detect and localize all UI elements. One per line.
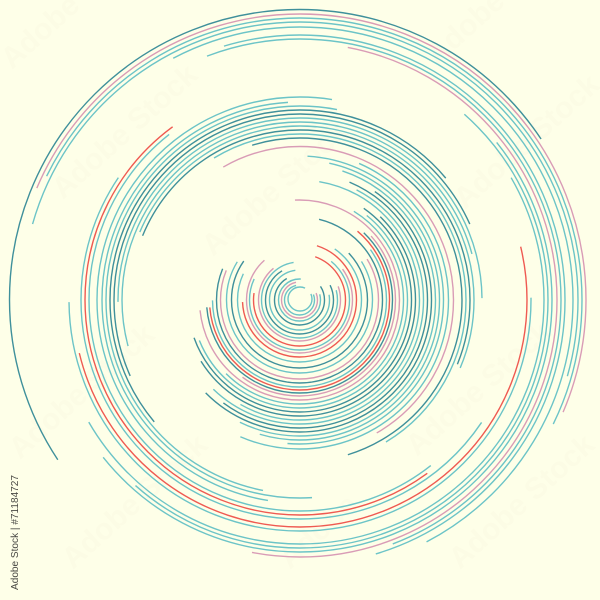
watermark pattern: Adobe Stock [443, 428, 600, 575]
watermark pattern: Adobe Stock [400, 315, 558, 462]
watermark pattern: Adobe [273, 488, 364, 575]
watermark pattern: Adobe Stock [56, 428, 214, 575]
watermark pattern: Adobe Stock [196, 115, 354, 262]
watermark pattern: Adobe Stock [3, 318, 161, 465]
watermark pattern: Adobe Stock [46, 58, 204, 205]
stock id caption: Adobe Stock | #71184727 [9, 475, 21, 590]
inner spiral arcs [150, 151, 448, 449]
